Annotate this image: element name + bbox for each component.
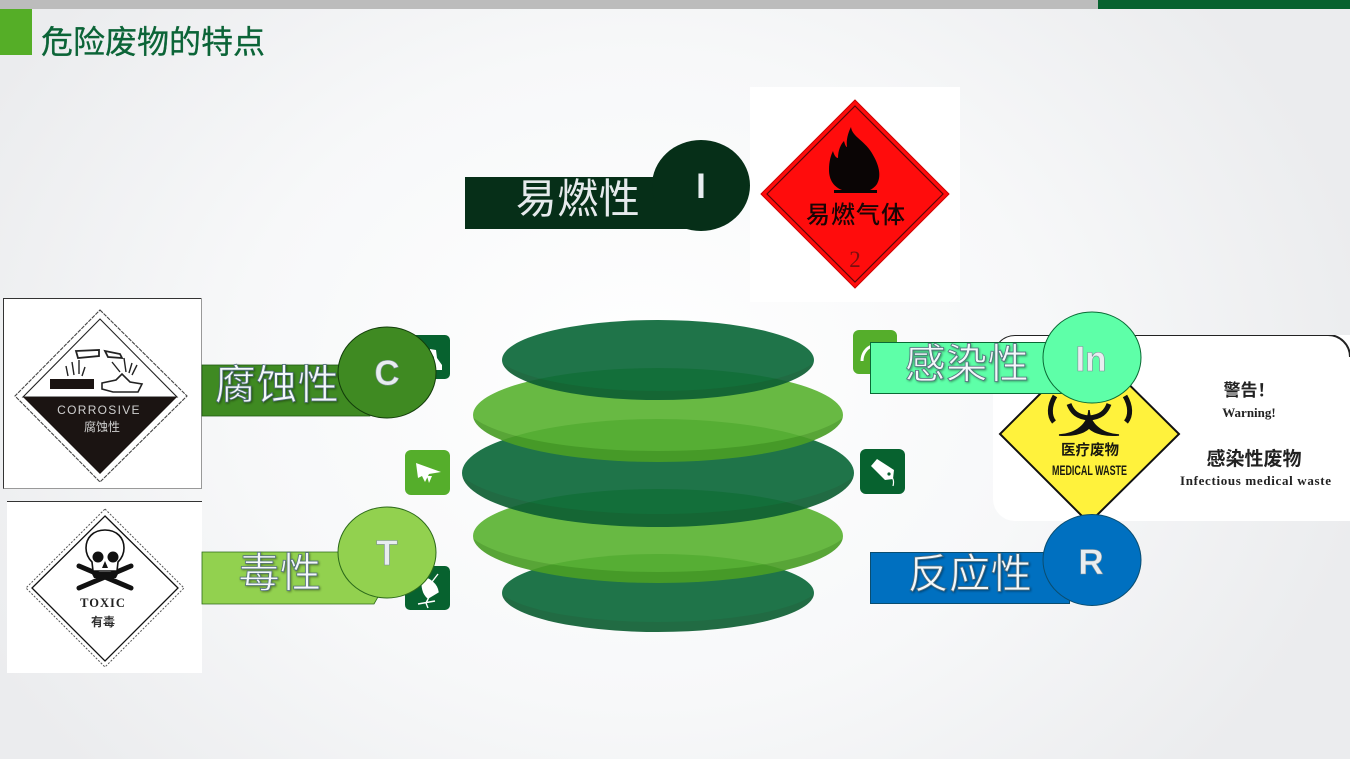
label: toxic: T xyxy=(376,534,398,573)
label: infectious: 感染性 xyxy=(905,341,1029,387)
title: 危险废物的特点 xyxy=(41,24,265,60)
label: corrosive: 腐蚀性 xyxy=(215,362,339,408)
hazard sign: medical waste: 感染性废物 xyxy=(1206,447,1302,470)
disc 3 xyxy=(462,419,854,527)
hazard sign: medical waste: Infectious medical waste xyxy=(1180,473,1331,488)
top bar xyxy=(0,0,1350,9)
hazard sign: corrosive xyxy=(3,298,202,489)
hazard sign: medical waste: MEDICAL WASTE xyxy=(1052,462,1127,478)
label: flammable xyxy=(465,140,750,231)
hazard sign: medical waste: 警告！ xyxy=(1224,381,1274,400)
icon: price tag xyxy=(860,449,905,494)
icon: satellite dish xyxy=(405,566,450,610)
label: toxic xyxy=(202,507,436,604)
hazard sign: flammable gas xyxy=(750,87,960,302)
hazard sign: corrosive: CORROSIVE xyxy=(57,403,141,417)
hazard sign: toxic: TOXIC xyxy=(80,596,126,610)
label: toxic: 毒性 xyxy=(238,550,322,596)
label: corrosive xyxy=(202,327,436,418)
hazard sign: flammable gas: 易燃气体 xyxy=(806,201,906,229)
label: reactive xyxy=(870,514,1141,606)
label: infectious xyxy=(870,312,1141,403)
title accent square xyxy=(0,9,32,55)
hazard sign: toxic xyxy=(7,501,202,673)
hazard sign: toxic: 有毒 xyxy=(91,614,115,629)
icon: phone xyxy=(405,335,450,379)
hazard sign: medical waste xyxy=(993,335,1350,523)
label: flammable: I xyxy=(696,167,706,206)
label: reactive: 反应性 xyxy=(908,551,1032,597)
hazard sign: medical waste: 医疗废物 xyxy=(1061,441,1119,459)
stacked disc graphic xyxy=(462,320,854,632)
label: flammable: 易燃性 xyxy=(516,176,640,222)
disc 2 xyxy=(473,368,843,462)
label: corrosive: C xyxy=(374,354,400,393)
disc 4 xyxy=(473,489,843,583)
hazard sign: medical waste: Warning! xyxy=(1222,405,1276,420)
hazard sign: corrosive: 腐蚀性 xyxy=(84,419,120,434)
disc 1 xyxy=(502,320,814,400)
disc 5 xyxy=(502,554,814,632)
label: reactive: R xyxy=(1078,543,1104,582)
icon: headset xyxy=(853,330,897,374)
label: infectious: In xyxy=(1075,340,1107,379)
hazard sign: flammable gas: 2 xyxy=(849,247,861,272)
icon: paper plane xyxy=(405,450,450,495)
